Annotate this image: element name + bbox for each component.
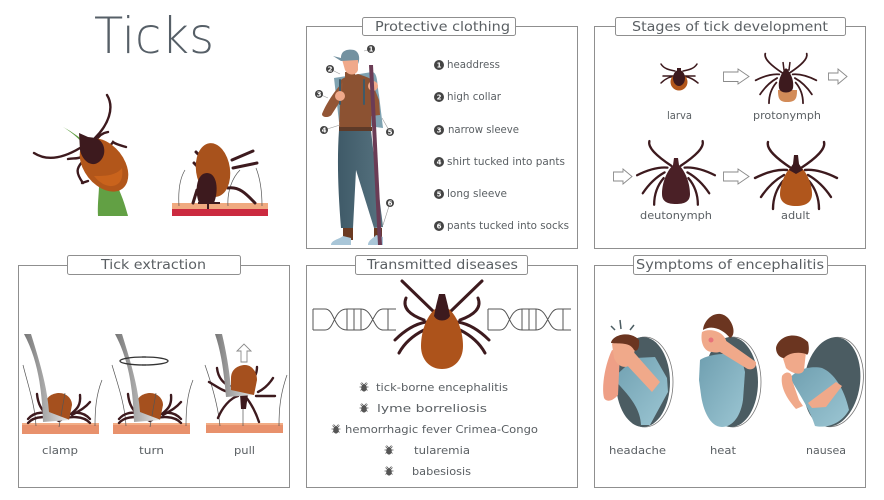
panel: transmitted diseases — [306, 256, 578, 488]
panel: tick extraction — [18, 256, 290, 488]
text: adult: adult — [781, 210, 810, 222]
text: clamp: clamp — [42, 445, 78, 457]
heading: tick extraction: Tick extraction — [100, 257, 206, 273]
list of protective clothing: pants tucked into socks — [447, 220, 569, 232]
list of protective clothing: high collar — [447, 91, 502, 103]
step: pull — [205, 334, 287, 457]
tick: larva — [661, 64, 698, 90]
title: Ticks — [94, 7, 214, 65]
large tick — [395, 281, 489, 369]
tick: deutonymph — [637, 141, 715, 205]
text: deutonymph: deutonymph — [640, 210, 712, 222]
heading: stages: Stages of tick development — [632, 19, 828, 35]
list of protective clothing: shirt tucked into pants — [447, 156, 565, 168]
list of protective clothing: 3 — [437, 126, 442, 134]
arrow — [614, 169, 632, 184]
disease list: lyme borreliosis — [377, 403, 487, 415]
tick: adult — [755, 142, 837, 209]
callout numbers on figure: 1 — [369, 46, 374, 54]
disease list — [332, 382, 538, 478]
panel: symptoms of encephalitis — [594, 256, 869, 488]
callout numbers on figure: 5 — [388, 128, 393, 136]
callout numbers on figure — [315, 45, 394, 225]
panel: protective clothing — [306, 18, 578, 248]
callout numbers on figure: 6 — [388, 200, 393, 208]
text: nausea: nausea — [806, 445, 846, 457]
tick: protonymph — [756, 54, 816, 103]
list of protective clothing: narrow sleeve — [448, 124, 519, 136]
text: protonymph: protonymph — [753, 110, 821, 122]
text: pull: pull — [234, 445, 255, 457]
heading: symptoms: Symptoms of encephalitis — [636, 257, 824, 273]
dna strand right — [488, 309, 571, 330]
figure: headache — [603, 320, 673, 457]
list of protective clothing: 1 — [437, 62, 442, 70]
heading: tick extraction — [68, 256, 240, 274]
list of protective clothing: long sleeve — [447, 188, 507, 200]
disease list: hemorrhagic fever Crimea-Congo — [345, 424, 538, 436]
heading: protective clothing: Protective clothing — [375, 19, 510, 35]
step: turn — [112, 334, 193, 457]
disease list: tularemia — [414, 445, 470, 457]
illustration: tick on grass blade — [34, 95, 138, 216]
dna strand left — [313, 309, 396, 330]
illustration: tick biting skin — [172, 141, 268, 216]
list of protective clothing — [434, 59, 569, 232]
text: heat: heat — [710, 445, 736, 457]
heading: transmitted diseases — [356, 256, 528, 274]
callout numbers on figure: 4 — [322, 126, 327, 134]
list of protective clothing: headdress — [447, 59, 500, 71]
arrow — [724, 169, 749, 184]
callout numbers on figure: 3 — [317, 90, 322, 98]
disease list: tick-borne encephalitis — [376, 382, 508, 394]
figure: nausea — [776, 333, 869, 457]
list of protective clothing: 2 — [437, 94, 442, 102]
rotation ring — [120, 357, 168, 365]
list of protective clothing: 4 — [437, 158, 442, 166]
step: clamp — [22, 334, 102, 457]
list of protective clothing: 6 — [437, 222, 442, 230]
illustration: man in protective clothing — [322, 50, 383, 245]
disease list: babesiosis — [412, 466, 471, 478]
text: headache: headache — [609, 445, 666, 457]
callout numbers on figure: 2 — [328, 66, 333, 74]
arrow — [828, 69, 847, 84]
text: turn: turn — [139, 445, 164, 457]
arrow — [724, 69, 749, 84]
arrow up — [237, 344, 251, 362]
heading: transmitted diseases: Transmitted diseases — [366, 257, 518, 273]
list of protective clothing: 5 — [437, 190, 442, 198]
text: larva: larva — [667, 110, 692, 122]
panel: stages of tick development — [594, 18, 866, 248]
figure: heat — [699, 314, 761, 457]
